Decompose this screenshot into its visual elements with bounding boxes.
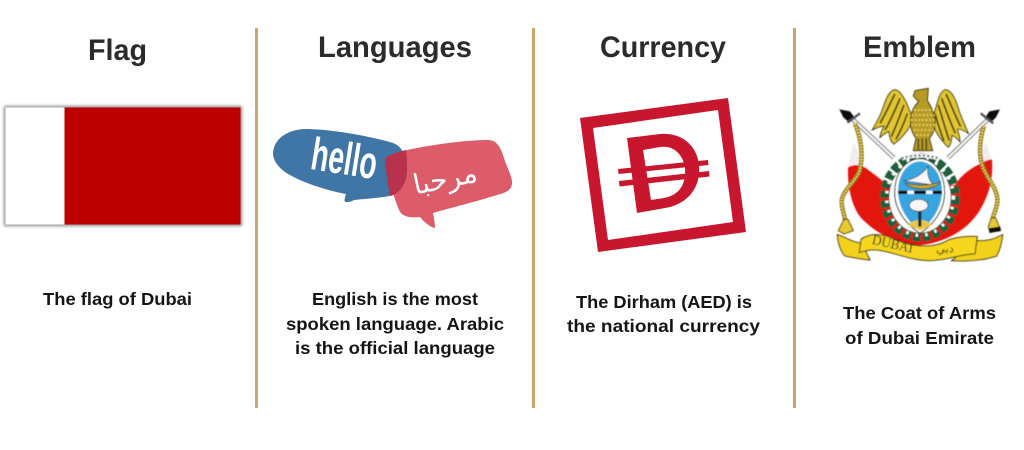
wreath <box>885 158 955 237</box>
icon: blue hello bubble: hello <box>308 127 381 189</box>
eagle wings <box>872 90 912 144</box>
tilted square frame <box>580 98 746 252</box>
spears <box>839 109 1000 158</box>
caption: emblem: of Dubai Emirate <box>845 328 994 348</box>
caption: emblem: The Coat of Arms <box>843 303 996 323</box>
letter D with double bar <box>618 134 710 213</box>
eagle body <box>910 88 935 151</box>
caption: languages: is the official language <box>295 338 495 358</box>
caption: currency <box>567 292 760 336</box>
heading: Emblem: Emblem <box>863 31 976 64</box>
red drapes <box>848 159 992 245</box>
icon: red marhaba bubble: مرحبا <box>410 156 480 202</box>
heading: Flag: Flag <box>88 34 147 67</box>
gold ribbon <box>837 233 1003 261</box>
shield <box>895 159 945 233</box>
heading: Languages: Languages <box>318 31 472 64</box>
white drape tops <box>848 142 992 168</box>
caption: flag: The flag of Dubai <box>43 289 192 309</box>
icon: dirham symbol in tilted frame <box>580 98 746 252</box>
caption: currency: the national currency <box>567 316 760 336</box>
caption: languages: English is the most <box>312 289 478 309</box>
icon: red marhaba bubble <box>385 140 512 228</box>
gold ropes and tassels <box>842 123 997 221</box>
eagle <box>872 88 968 151</box>
icon: speech bubbles <box>273 127 512 228</box>
icon: blue hello bubble <box>273 127 407 202</box>
gold ribbon: دبي <box>936 242 954 256</box>
icon: coat of arms of Dubai <box>837 88 1003 261</box>
heading: Currency: Currency <box>600 31 726 64</box>
caption: languages <box>286 289 504 358</box>
caption: currency: The Dirham (AED) is <box>576 292 752 312</box>
laurel top pearls <box>902 155 938 158</box>
gold ribbon: DUBAI <box>870 233 915 257</box>
caption: emblem <box>843 303 996 348</box>
flag of Dubai <box>4 106 242 226</box>
caption: languages: spoken language. Arabic <box>286 314 504 334</box>
